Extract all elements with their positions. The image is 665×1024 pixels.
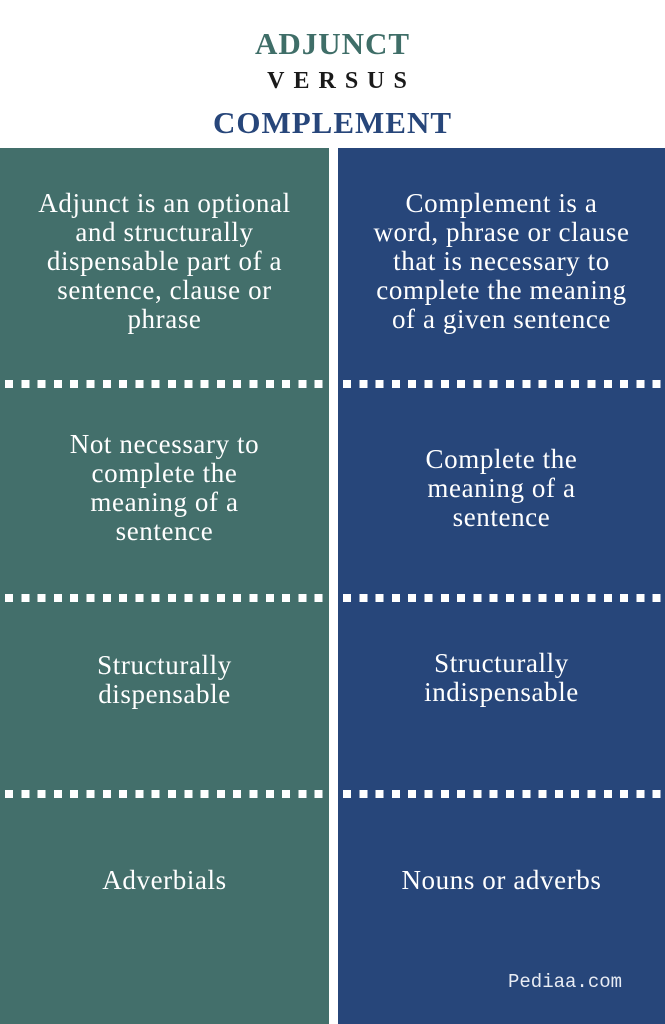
title: complement: COMPLEMENT [213,105,452,140]
text: meaning complement: Complete the [426,444,577,474]
text: definition adjunct [38,188,291,334]
text: definition complement: that is necessary to [393,246,610,276]
text: examples adjunct: Adverbials [102,864,227,894]
text: structure complement: Structurally [434,648,569,678]
panel: complement [338,148,665,1024]
text: meaning complement: meaning of a [427,472,576,502]
text: definition complement: Complement is a [406,188,597,218]
text: structure adjunct [97,650,232,709]
text: structure adjunct: Structurally [97,650,232,680]
text: definition adjunct: sentence, clause or [57,274,272,304]
title: adjunct: ADJUNCT [255,26,410,61]
panel: adjunct [0,148,329,1024]
text: meaning adjunct: sentence [116,516,213,546]
text: meaning adjunct: meaning of a [90,487,239,517]
text: definition adjunct: phrase [127,304,202,334]
watermark: Pediaa.com [508,971,622,993]
text: examples complement: Nouns or adverbs [401,864,602,894]
title: versus: VERSUS [267,68,416,94]
text: meaning adjunct: complete the [92,458,237,488]
text: meaning complement: sentence [453,502,550,532]
text: definition adjunct: and structurally [75,216,254,246]
text: definition complement [373,188,630,334]
text: structure complement: indispensable [424,677,579,707]
text: meaning adjunct: Not necessary to [70,429,259,459]
text: definition complement: of a given sentence [392,304,611,334]
text: meaning complement [426,444,577,532]
text: definition adjunct: dispensable part of a [47,246,282,276]
text: definition adjunct: Adjunct is an optional [38,188,291,218]
text: meaning adjunct [70,429,259,546]
text: structure complement [424,648,579,707]
text: definition complement: complete the meaning [376,274,627,304]
text: definition complement: word, phrase or clause [373,216,630,246]
text: structure adjunct: dispensable [98,679,231,709]
